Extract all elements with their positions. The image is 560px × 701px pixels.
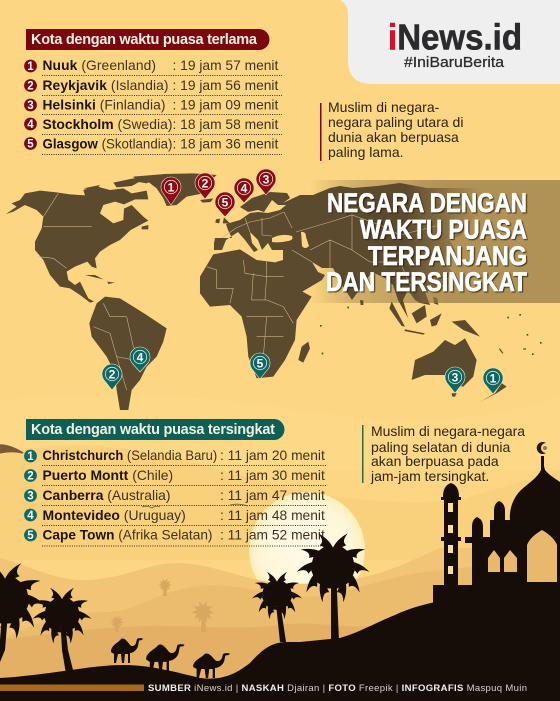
foreground palms (0, 530, 370, 674)
pin 1: 1 (490, 371, 497, 385)
mosque (433, 442, 560, 701)
eurasia (214, 183, 552, 318)
greenland (147, 173, 217, 206)
crescent and star (537, 442, 547, 454)
text block: north: paling lama. (328, 144, 404, 160)
tasmania and new zealand (452, 383, 507, 402)
pin 2: 2 (109, 367, 116, 381)
text block: north: dunia akan berpuasa (328, 129, 459, 145)
heading: Kota dengan waktu puasa tersingkat (31, 422, 275, 438)
foreground ground (0, 600, 560, 701)
pin 3: 3 (452, 370, 459, 384)
iceland and british isles (200, 198, 230, 223)
oceania and southeast asia islands (320, 297, 542, 402)
row 3: 3 (27, 490, 34, 502)
row 1: 1 (27, 61, 34, 73)
text block: north: Muslim di negara- (328, 99, 440, 115)
row 2: Puerto Montt (Chile) (42, 468, 173, 483)
madagascar (298, 342, 310, 363)
heading: Kota dengan waktu puasa terlama (31, 32, 258, 48)
faint background palms (110, 578, 215, 632)
text block: north (320, 99, 463, 161)
footer bar (0, 684, 144, 691)
main dome (510, 456, 560, 530)
pin 1: 1 (168, 180, 175, 194)
title: TERPANJANG (368, 241, 527, 271)
asian borders (222, 212, 440, 285)
americas, africa and atlantic islands (6, 173, 312, 410)
row 2: : 19 jam 56 menit (172, 78, 278, 93)
arched windows (488, 530, 557, 582)
row 1: 1 (27, 451, 34, 463)
row 4 (24, 117, 282, 134)
title band fade over map (405, 180, 560, 303)
row 5: : 18 jam 36 menit (172, 136, 278, 152)
row 2: : 11 jam 30 menit (220, 468, 325, 483)
minaret (441, 483, 461, 585)
small pacific islands (320, 307, 542, 355)
row 3: : 11 jam 47 menit (220, 488, 325, 503)
row 4: : 11 jam 48 menit (220, 508, 325, 523)
row 3: : 19 jam 09 menit (172, 98, 278, 112)
pin 3 (445, 367, 465, 393)
black sea and caspian sea (272, 232, 309, 248)
palm centre (251, 570, 303, 642)
camels (111, 638, 230, 678)
text block: south: Muslim di negara-negara (371, 423, 525, 439)
pin 5: 5 (222, 195, 229, 209)
title: DAN TERSINGKAT (326, 267, 527, 297)
row 5: Cape Town (Afrika Selatan) (42, 528, 212, 542)
row 5: 5 (27, 138, 34, 150)
australia (412, 338, 477, 387)
small towers (472, 501, 505, 584)
tagline: #IniBaruBerita (404, 55, 505, 71)
row 5: Glasgow (Skotlandia) (42, 136, 172, 152)
row 2 (24, 78, 282, 96)
pin 2: 2 (202, 176, 209, 190)
text block: south: jam-jam tersingkat. (370, 468, 489, 484)
minaret windows (448, 503, 453, 574)
pin 5: 5 (257, 356, 264, 370)
world map (6, 173, 552, 410)
text block: south: akan berpuasa pada (371, 453, 499, 469)
logo wordmark: iNews.id (388, 16, 522, 58)
row 4 (24, 508, 327, 526)
palm far left (0, 560, 46, 662)
pin 4: 4 (137, 350, 144, 364)
row 5: 5 (27, 530, 34, 542)
row 2: 2 (27, 470, 34, 482)
text block: south: paling selatan di dunia (371, 439, 511, 455)
row 4: Stockholm (Swedia) (42, 117, 172, 132)
palm left (32, 585, 92, 674)
row 3: 3 (27, 100, 34, 112)
title band (310, 180, 560, 303)
birds (0, 445, 248, 508)
africa (200, 249, 312, 378)
credits: SUMBER iNews.id | NASKAH Djairan | FOTO Freepik | INFOGRAFIS Maspuq Muin (148, 683, 527, 694)
south america (89, 297, 167, 410)
row 4: Montevideo (Uruguay) (42, 508, 186, 523)
desert dunes and sun (0, 394, 560, 701)
row 1: : 11 jam 20 menit (220, 448, 325, 463)
row 2: Reykjavik (Islandia) (42, 78, 168, 93)
pin 4: 4 (241, 181, 248, 195)
row 1: : 19 jam 57 menit (172, 58, 278, 73)
panel: longest fasting cities (24, 29, 282, 154)
north america (6, 186, 148, 303)
red map pins (161, 169, 276, 217)
pin 2 (102, 364, 122, 390)
title (326, 188, 527, 297)
canadian arctic islands (83, 174, 165, 229)
pin 5 (250, 353, 270, 379)
row 3 (24, 98, 282, 114)
row 3 (24, 488, 327, 506)
title: WAKTU PUASA (360, 214, 527, 244)
row 4: : 18 jam 58 menit (172, 117, 278, 132)
row 2 (24, 468, 327, 486)
pin 4 (130, 347, 150, 372)
panel: shortest fasting cities (24, 419, 327, 546)
text block: north: negara paling utara di (328, 114, 463, 130)
row 1 (24, 58, 282, 76)
row 5: : 11 jam 52 menit (220, 528, 325, 542)
row 2: 2 (27, 80, 34, 92)
row 4: 4 (27, 119, 34, 131)
row 1: Christchurch (Selandia Baru) (42, 448, 217, 463)
pin 1 (483, 368, 503, 394)
mosque body (433, 520, 560, 701)
logo panel (340, 0, 560, 84)
row 5 (24, 528, 327, 546)
text block: south (362, 423, 525, 484)
caribbean islands (85, 275, 115, 284)
row 3: Helsinki (Finlandia) (42, 98, 166, 112)
row 1: Nuuk (Greenland) (42, 58, 156, 73)
pin 3: 3 (263, 172, 270, 186)
country borders (38, 193, 293, 390)
green map pins (102, 347, 503, 394)
row 5 (24, 136, 282, 154)
row 3: Canberra (Australia) (42, 488, 170, 503)
palm large (296, 530, 370, 642)
row 4: 4 (27, 510, 34, 522)
row 1 (24, 448, 327, 466)
